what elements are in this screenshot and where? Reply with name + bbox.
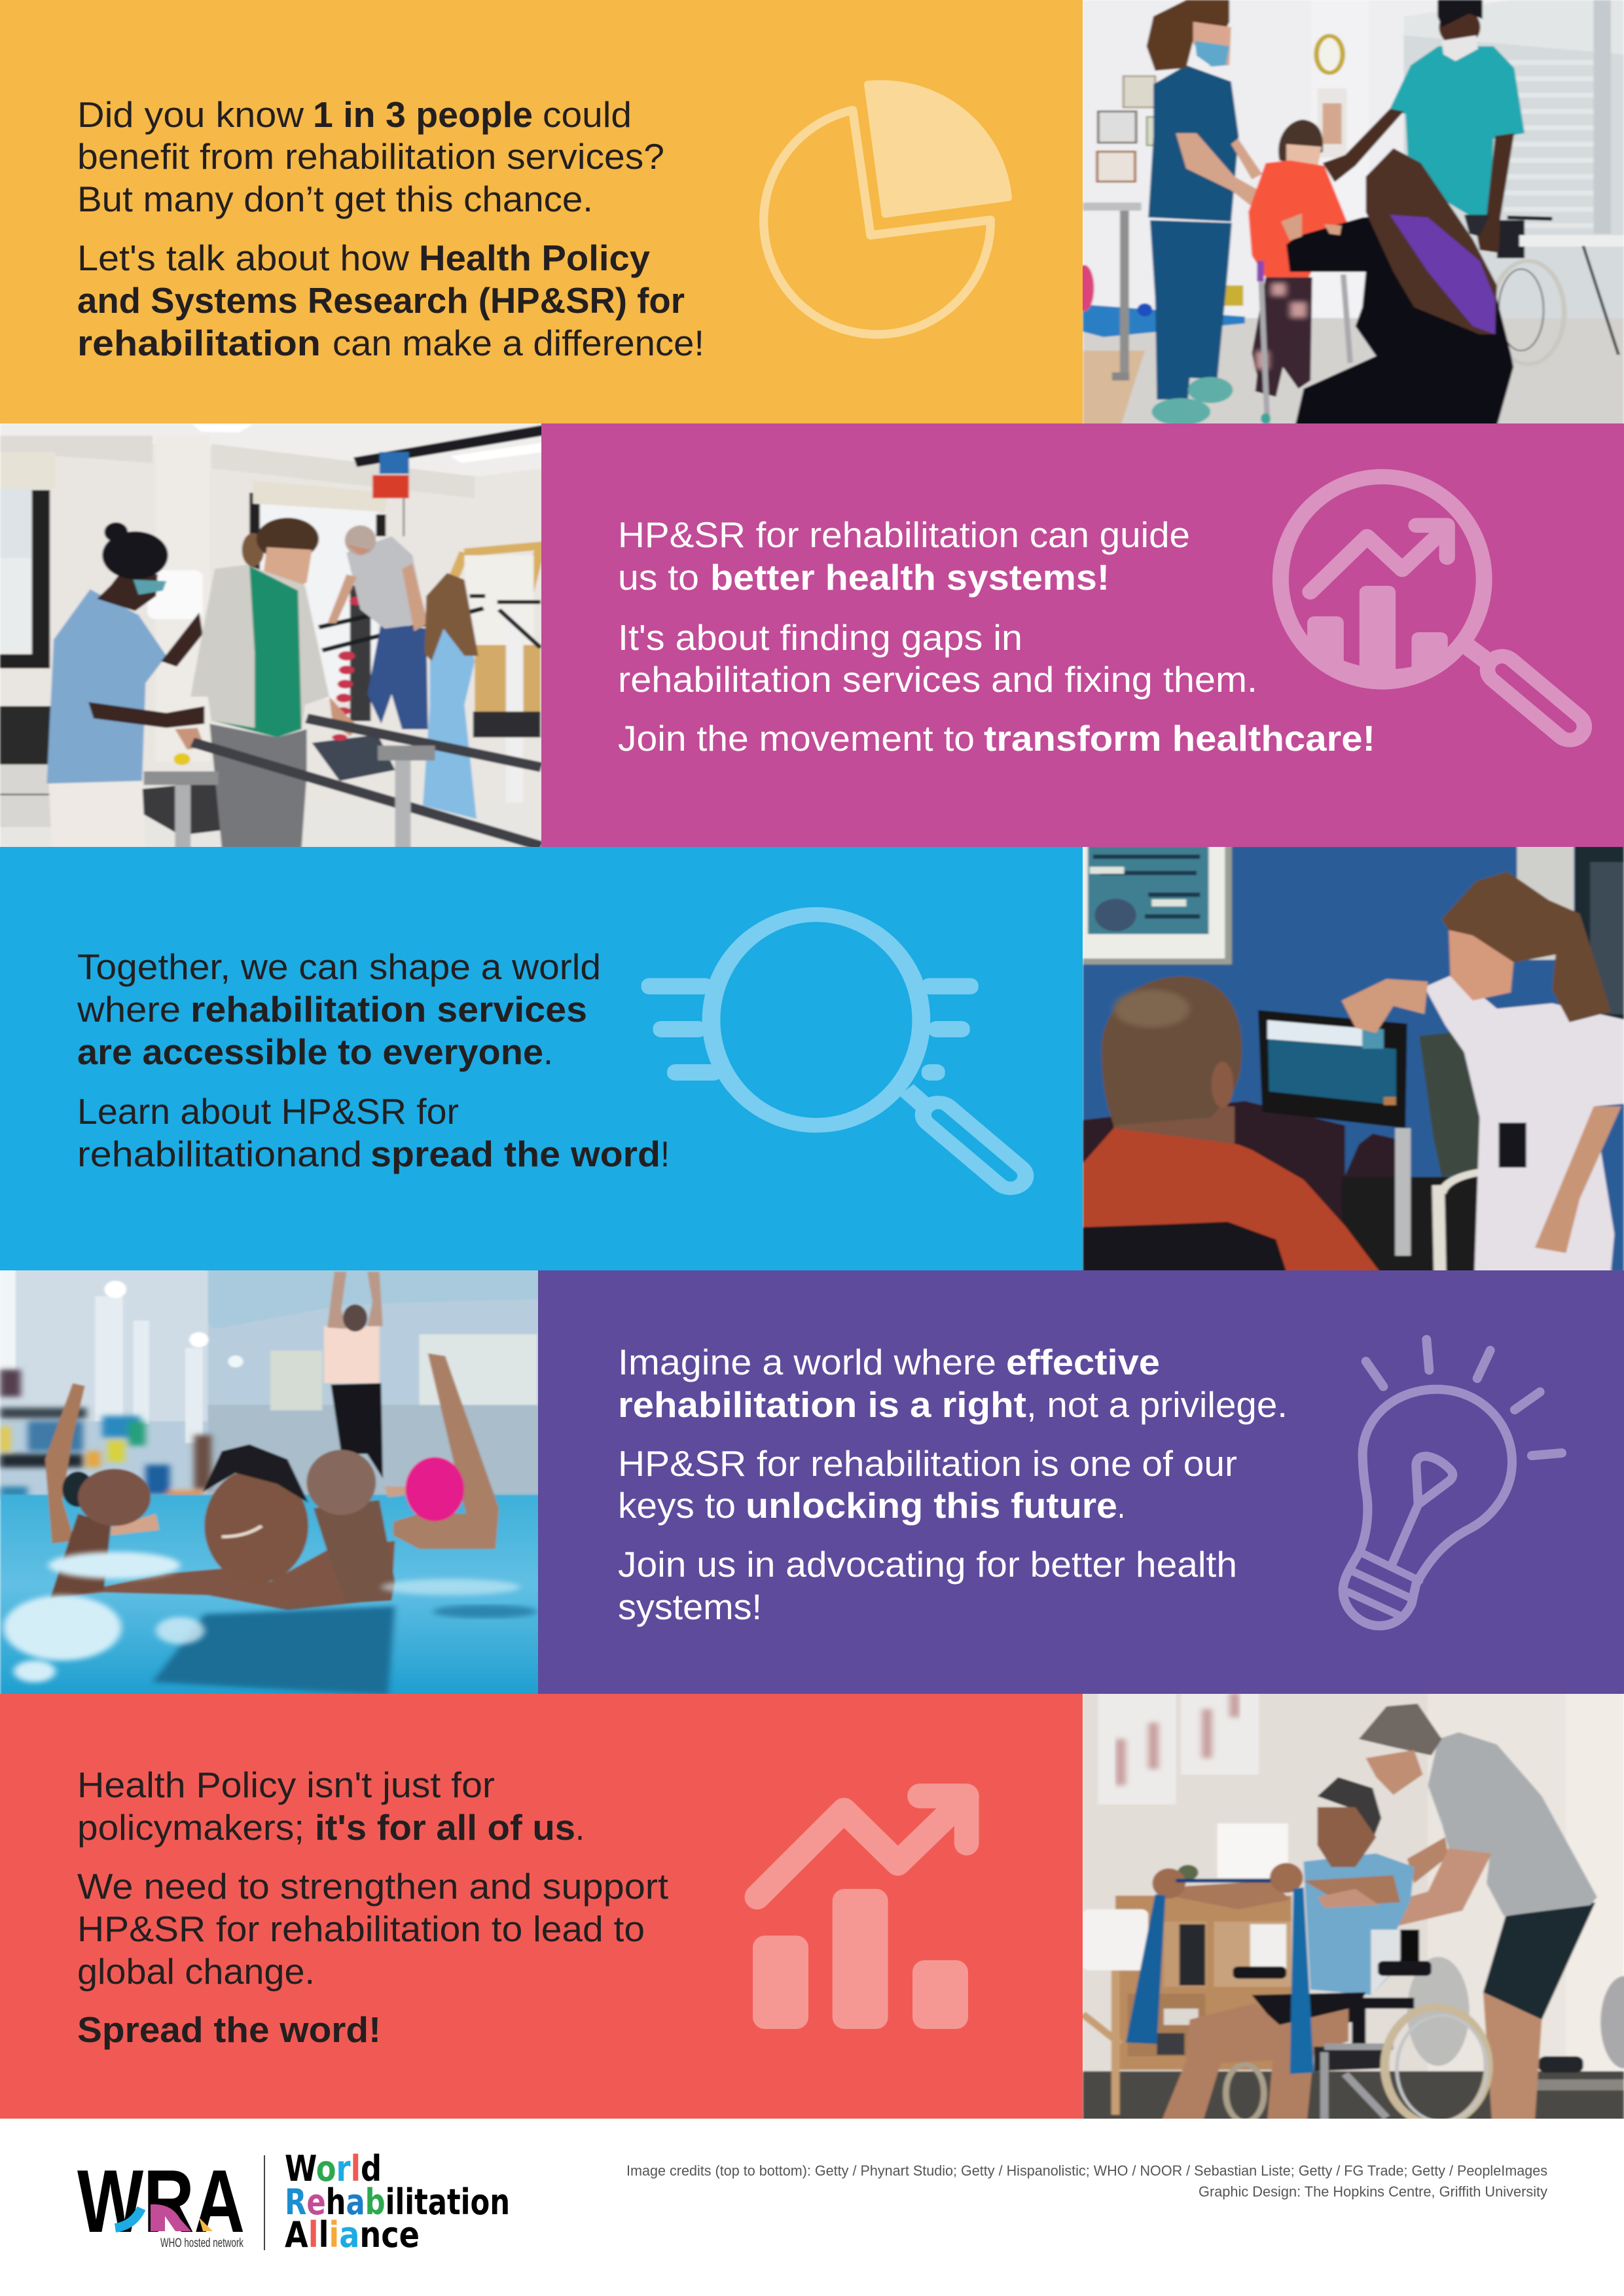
- text: did you know: and Systems Research (HP&SR) for: [77, 280, 685, 321]
- text: health policy for all: policymakers;: [77, 1807, 304, 1848]
- nurse: [48, 781, 145, 848]
- band: [1126, 1894, 1166, 2044]
- text: accessible to everyone: !: [660, 1134, 670, 1174]
- ball, weights: [1600, 1976, 1624, 2068]
- icon: magnifier with chart: [1280, 476, 1570, 726]
- kneeling woman: [1286, 215, 1513, 426]
- panel: rehabilitation is a right (purple): [538, 1270, 1624, 1694]
- patient: [209, 724, 307, 848]
- panel: accessible to everyone (blue): [0, 847, 1083, 1270]
- text: did you know: Let's talk about how: [77, 238, 409, 278]
- instructor: [331, 1383, 383, 1479]
- text: did you know: Did you know: [77, 94, 304, 135]
- text: effective rehabilitation is a right: systems!: [618, 1587, 762, 1627]
- lower water: [153, 1606, 395, 1695]
- text: did you know: can make a difference!: [333, 323, 704, 363]
- text: accessible to everyone: where: [77, 989, 181, 1030]
- text: accessible to everyone: Together, we can shape a world: [77, 946, 601, 987]
- back equipment: [142, 781, 225, 835]
- text: better health systems: HP&SR for rehabilitation can guide: [618, 514, 1190, 555]
- logo wordmark: World Rehabilitation Alliance: Alliance: [285, 2214, 420, 2255]
- tablet: [1258, 1010, 1407, 1128]
- dark furniture: [1083, 1101, 1428, 1272]
- man: [1113, 1103, 1235, 1145]
- icon: magnifier with speed lines: [641, 914, 1011, 1176]
- panel: spread the word (red): [0, 1694, 1083, 2119]
- text: accessible to everyone: .: [543, 1031, 553, 1072]
- logo wordmark: World Rehabilitation Alliance: World: [285, 2148, 382, 2189]
- text: effective rehabilitation is a right: Join us in advocating for better health: [618, 1544, 1237, 1585]
- text: effective rehabilitation is a right: .: [1117, 1485, 1125, 1526]
- text: better health systems: [618, 514, 1375, 759]
- nurse: [1424, 973, 1624, 1272]
- text: effective rehabilitation is a right: effective: [1006, 1342, 1160, 1382]
- text: health policy for all: HP&SR for rehabilitation to lead to: [77, 1909, 645, 1949]
- text: better health systems: better health systems!: [710, 557, 1110, 598]
- man: [1390, 46, 1525, 217]
- credits: Graphic Design: The Hopkins Centre, Griffith University: [1199, 2183, 1547, 2200]
- text: accessible to everyone: [77, 946, 670, 1174]
- girl: [423, 620, 477, 819]
- text: did you know: 1 in 3 people: [313, 94, 533, 135]
- wheelchair: [1400, 1929, 1419, 1968]
- credits: Image credits (top to bottom): Getty / Phynart Studio; Getty / Hispanolistic; WHO / NOOR / Sebastian Liste; Getty / FG Trade; Getty / PeopleImages: [626, 2162, 1547, 2179]
- text: effective rehabilitation is a right: rehabilitation is a right: [618, 1384, 1026, 1425]
- text: health policy for all: [77, 1765, 668, 2050]
- patient: [1304, 1854, 1414, 1995]
- girl: [1252, 278, 1312, 397]
- text: effective rehabilitation is a right: keys to: [618, 1485, 736, 1526]
- text: effective rehabilitation is a right: [618, 1342, 1288, 1627]
- right swimmer: [393, 1354, 499, 1549]
- text: effective rehabilitation is a right: unlocking this future: [746, 1485, 1117, 1526]
- panel: better health systems (magenta): [541, 423, 1624, 847]
- text: did you know: could: [543, 94, 632, 135]
- text: better health systems: transform healthcare!: [984, 718, 1375, 759]
- text: accessible to everyone: Learn about HP&SR for: [77, 1091, 459, 1132]
- text: better health systems: rehabilitation services and fixing them.: [618, 659, 1257, 700]
- icon: pie chart: [764, 84, 1009, 334]
- footer: WRA logo: [77, 2148, 510, 2255]
- shelf: [1115, 1895, 1291, 2070]
- text: accessible to everyone: rehabilitationand: [77, 1134, 362, 1174]
- icon: growth chart: [753, 1796, 968, 2029]
- logo wordmark: World Rehabilitation Alliance: [285, 2148, 510, 2255]
- water: [0, 1495, 543, 1696]
- text: health policy for all: global change.: [77, 1951, 315, 1992]
- photo: smiling man in aquatic therapy pool: [0, 1270, 538, 1694]
- text: did you know: rehabilitation: [77, 323, 321, 363]
- text: health policy for all: it's for all of us: [315, 1807, 575, 1848]
- text: effective rehabilitation is a right: , not a privilege.: [1026, 1384, 1288, 1425]
- icon: light bulb: [1343, 1340, 1562, 1626]
- text: effective rehabilitation is a right: Imagine a world where: [618, 1342, 996, 1382]
- man: [50, 1541, 395, 1610]
- shelves: [0, 1370, 211, 1501]
- text: accessible to everyone: spread the word: [370, 1134, 660, 1174]
- text: WHO hosted network: WHO hosted network: [160, 2236, 244, 2250]
- logo wordmark: World Rehabilitation Alliance: Rehabilitation: [285, 2181, 510, 2223]
- text: accessible to everyone: are accessible to everyone: [77, 1031, 543, 1072]
- text: health policy for all: Health Policy isn't just for: [77, 1765, 495, 1805]
- wheelchair: [1492, 261, 1564, 364]
- man: [367, 622, 428, 729]
- text: better health systems: Join the movement to: [618, 718, 975, 759]
- text: did you know: Health Policy: [419, 238, 650, 278]
- text: effective rehabilitation is a right: HP&SR for rehabilitation is one of our: [618, 1443, 1237, 1484]
- left swimmer: [45, 1383, 85, 1543]
- left woman: [1148, 65, 1238, 221]
- text: accessible to everyone: rehabilitation services: [190, 989, 587, 1030]
- text: health policy for all: We need to strengthen and support: [77, 1866, 668, 1907]
- text: did you know: But many don’t get this chance.: [77, 179, 593, 219]
- text: did you know: benefit from rehabilitation services?: [77, 136, 664, 177]
- text: better health systems: us to: [618, 557, 699, 598]
- rails: [192, 742, 541, 846]
- photo: child walking with crutches, therapists: [1083, 0, 1624, 423]
- panel: 1 in 3 people (yellow): [0, 0, 1083, 423]
- logo mark: WRA: WRA: [77, 2151, 245, 2251]
- credits: [626, 2162, 1547, 2200]
- text: health policy for all: Spread the word!: [77, 2009, 381, 2050]
- therapist: [1483, 1992, 1542, 2120]
- text: health policy for all: .: [575, 1807, 585, 1848]
- photo: therapist assisting man in wheelchair with band: [1083, 1694, 1624, 2119]
- photo: therapist with patient at parallel bars: [0, 423, 541, 847]
- text: better health systems: It's about finding gaps in: [618, 617, 1022, 658]
- photo: nurse showing communication tablet: [1083, 847, 1624, 1270]
- text: did you know: [77, 94, 704, 363]
